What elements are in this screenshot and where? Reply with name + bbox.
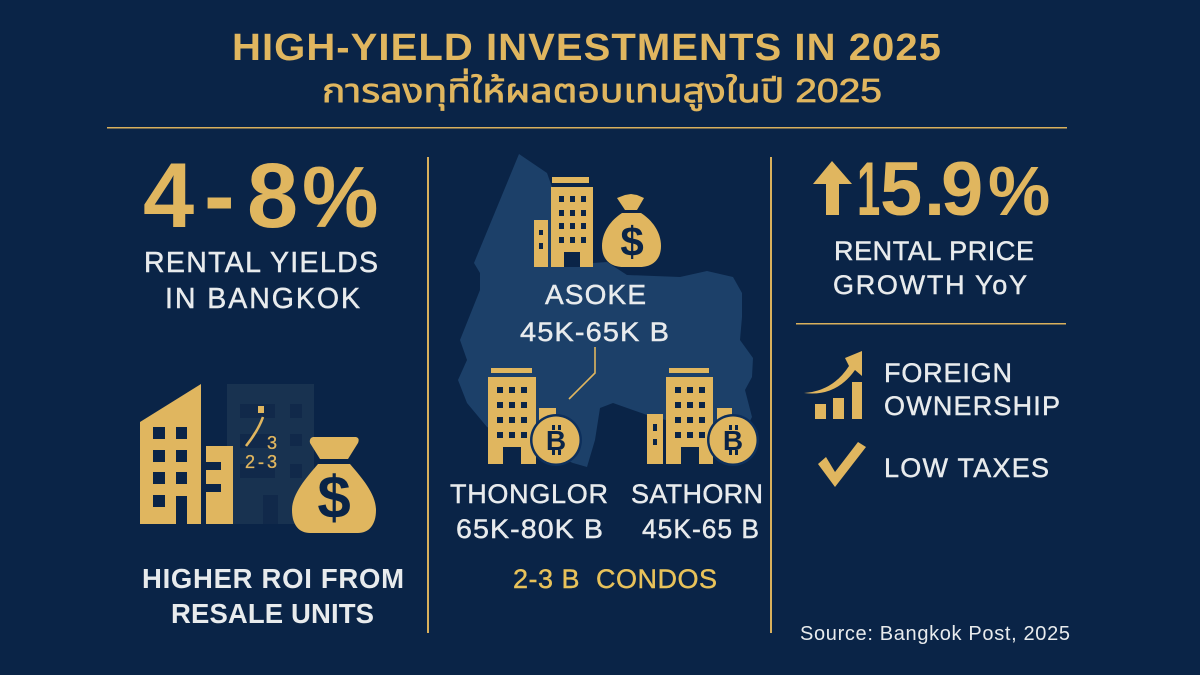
icon: Thonglor building with coin: B [546,425,566,456]
label: Sathorn price: SATHORN [631,479,763,509]
icon: money bag [292,437,376,533]
label: Asoke price: 45K-65K B [520,317,670,347]
label: Thonglor price [450,479,608,544]
label: higher ROI from resale units [142,563,404,629]
label: Sathorn price [631,479,763,544]
label: rental yields in Bangkok [144,247,378,315]
label: Sathorn price: 45K-65 B [642,514,760,544]
icon: gold office building [140,384,233,524]
stat: 4-8%: % [302,150,378,246]
label: rental price growth: RENTAL PRICE [834,236,1034,266]
label: Asoke price: ASOKE [545,279,646,310]
icon: check mark [818,442,866,487]
icon: Sathorn buildings with coin [647,368,759,466]
label: foreign ownership: OWNERSHIP [884,391,1060,421]
title: Thai heading: การลงทุที่ให้ผลตอบเทนสูงในปี 2025 [322,68,882,111]
label: higher ROI from resale units: HIGHER ROI FROM [142,563,404,594]
label: Thonglor price: THONGLOR [450,479,608,509]
icon: Asoke money bag [602,194,661,267]
label: higher ROI from resale units: RESALE UNITS [171,598,374,629]
source note: Source: Bangkok Post, 2025 [800,623,1070,645]
annotation: 2-3 marks: 2-3 [245,452,277,472]
label: Thonglor price: 65K-80K B [456,514,604,544]
panel: right growth and benefits [796,146,1070,645]
stat: 15.9%: % [988,152,1050,230]
icon: Sathorn buildings with coin: B [723,425,743,456]
label: foreign ownership: FOREIGN [884,358,1012,388]
icon: growth chart [804,351,862,419]
annotation: 2-3 marks [245,406,277,472]
icon: Thonglor building with coin [488,368,582,466]
label: rental yields in Bangkok: RENTAL YIELDS [144,247,378,279]
panel: centre map of districts [450,154,763,594]
map: Bangkok silhouette [458,154,753,467]
label: rental price growth [833,236,1034,300]
icon: faded background building [227,384,314,524]
label: low taxes: LOW TAXES [884,453,1049,483]
icon: up arrow [813,161,852,215]
icon: money bag: $ [317,464,351,531]
icon: Asoke money bag: $ [620,218,644,265]
stat: 4-8%: 4-8 [143,145,298,247]
title: English heading: HIGH-YIELD INVESTMENTS IN 2025 [232,27,942,69]
stat: 15.9%: 1 [857,146,880,231]
label: Asoke price [520,279,670,347]
connector line [569,347,595,399]
annotation: 2-3 marks: 3 [267,433,277,453]
label: 2-3 B condos: 2-3 B CONDOS [513,564,717,594]
icon: Asoke buildings [534,177,593,267]
stat: 15.9%: 5.9 [880,147,983,232]
label: foreign ownership [884,358,1060,421]
stat: 15.9% [857,146,1050,232]
label: rental yields in Bangkok: IN BANGKOK [165,283,360,315]
panel: left yields and ROI [140,145,404,629]
label: rental price growth: GROWTH YoY [833,270,1027,300]
